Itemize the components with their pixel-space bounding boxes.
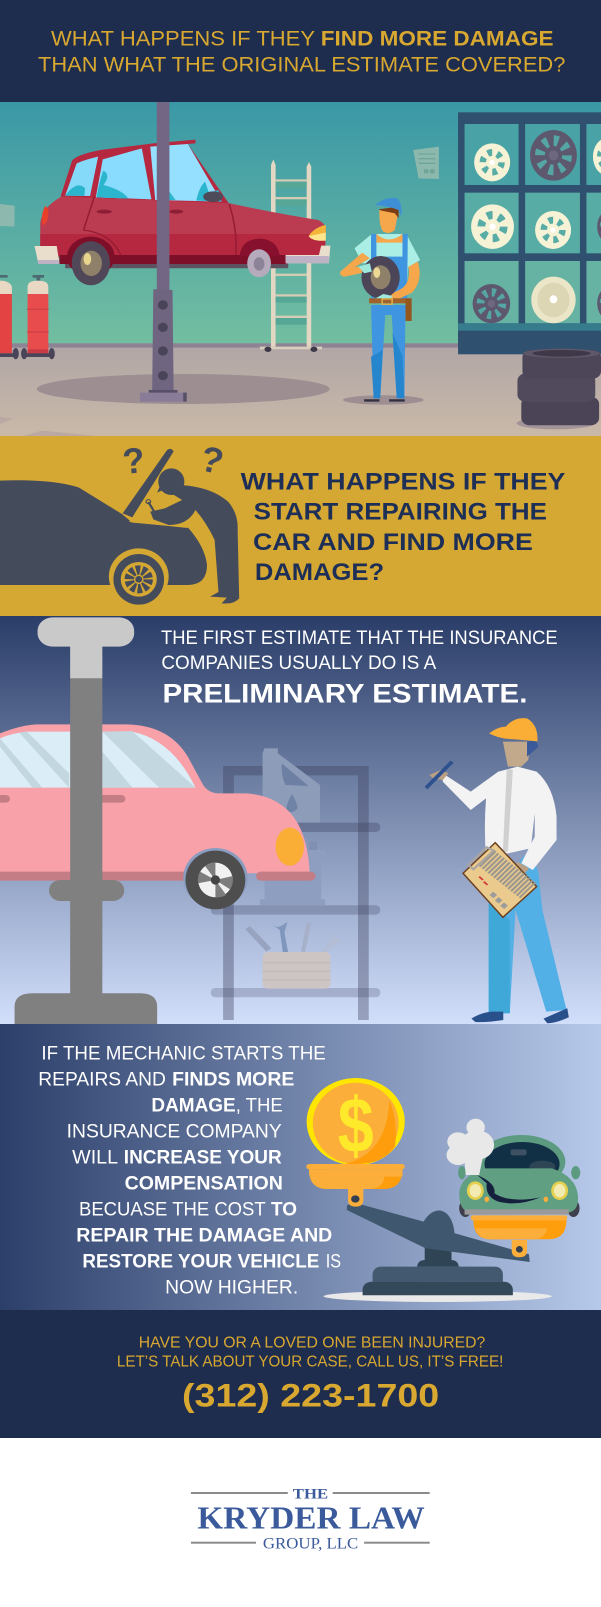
body text: DAMAGE [151, 1095, 236, 1116]
panel: call to action footer [0, 1310, 601, 1438]
panel: preliminary estimate [0, 616, 601, 1024]
heading [241, 468, 565, 586]
gas cylinders [0, 275, 55, 359]
logo: KRYDER LAW [197, 1499, 425, 1535]
intro text [161, 628, 558, 708]
body text: BECUASE THE COST [79, 1199, 266, 1220]
logo [0, 1438, 601, 1607]
illustration: pink car on lift [0, 724, 315, 909]
mechanic [340, 198, 424, 405]
left pan with coin [306, 1078, 405, 1207]
icon: question marks: ? [196, 437, 228, 482]
wheel rack [458, 112, 601, 354]
icon: question marks: ? [121, 439, 147, 482]
red car [34, 140, 330, 285]
intro text: PRELIMINARY ESTIMATE. [162, 678, 527, 708]
icon: mechanic repairing car silhouette [0, 449, 239, 605]
body text: TO [271, 1199, 297, 1220]
body text: REPAIRS AND [38, 1069, 166, 1090]
lift shadow [37, 374, 330, 404]
body text: , THE [236, 1095, 283, 1116]
logo: THE [293, 1487, 328, 1503]
body text: COMPENSATION [125, 1173, 283, 1194]
right pan with damaged car [447, 1119, 580, 1257]
body text: IF THE MECHANIC STARTS THE [41, 1043, 326, 1064]
icon: question marks [121, 437, 228, 482]
phone number: (312) 223-1700 [182, 1377, 439, 1413]
body text: INSURANCE COMPANY [67, 1121, 282, 1142]
panel: compensation [0, 1024, 601, 1310]
call to action text [117, 1334, 503, 1370]
call to action text: HAVE YOU OR A LOVED ONE BEEN INJURED? [139, 1334, 485, 1351]
heading: DAMAGE? [255, 559, 384, 586]
title: FIND MORE DAMAGE [321, 28, 554, 51]
illustration: lift column [15, 617, 157, 1024]
lift post [140, 102, 187, 402]
body text: RESTORE YOUR VEHICLE [82, 1251, 319, 1272]
body text [38, 1043, 341, 1298]
icon: dollar sign: $ [338, 1081, 374, 1169]
title [38, 28, 565, 77]
heading: WHAT HAPPENS IF THEY [241, 468, 565, 495]
illustration: shelf with supplies [211, 748, 380, 1020]
title: WHAT HAPPENS IF THEY [51, 28, 315, 51]
body text: REPAIR THE DAMAGE AND [76, 1225, 332, 1246]
body text: FINDS MORE [172, 1069, 294, 1090]
ladder [260, 159, 322, 352]
body text: NOW HIGHER. [165, 1277, 298, 1298]
illustration: scale [306, 1078, 580, 1302]
heading: START REPAIRING THE [254, 498, 547, 525]
header banner [0, 0, 601, 102]
wall notices [0, 147, 439, 227]
panel: gold section [0, 436, 601, 616]
illustration: inspector with clipboard [425, 718, 569, 1023]
panel: garage illustration [0, 102, 601, 437]
title: THAN WHAT THE ORIGINAL ESTIMATE COVERED? [38, 54, 565, 77]
intro text: THE FIRST ESTIMATE THAT THE INSURANCE [161, 628, 558, 649]
heading: CAR AND FIND MORE [253, 529, 533, 556]
logo: GROUP, LLC [263, 1535, 358, 1552]
intro text: COMPANIES USUALLY DO IS A [161, 653, 437, 674]
stacked tires [517, 349, 601, 429]
body text: INCREASE YOUR [124, 1147, 282, 1168]
body text: IS [326, 1251, 341, 1272]
call to action text: LET’S TALK ABOUT YOUR CASE, CALL US, IT’S FREE! [117, 1353, 503, 1370]
body text: WILL [72, 1147, 118, 1168]
